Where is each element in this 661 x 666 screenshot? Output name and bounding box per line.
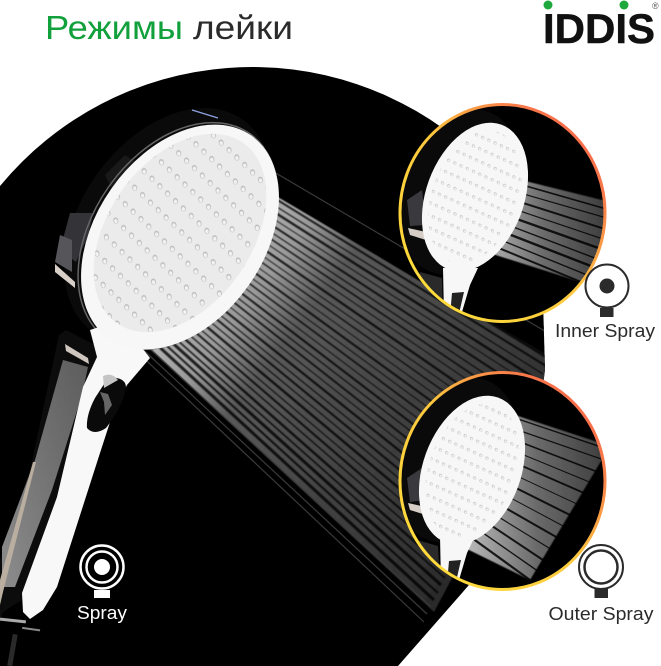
rim xyxy=(402,110,509,274)
icon: outer spray xyxy=(579,545,623,598)
inner spray water xyxy=(494,181,604,282)
neck xyxy=(420,272,442,299)
neck xyxy=(418,540,439,564)
spray mode label: Inner Spray: Inner Spray xyxy=(555,320,656,341)
gradient ring xyxy=(400,372,605,590)
icon: spray xyxy=(80,546,124,598)
rim xyxy=(402,378,512,542)
spray mode label: Outer Spray xyxy=(548,545,654,624)
face xyxy=(418,396,526,541)
inset: outer spray xyxy=(398,371,606,591)
spray mode label: Outer Spray: Outer Spray xyxy=(548,603,654,624)
title: лейки xyxy=(193,9,293,46)
logo: IDDIS: IDDIS xyxy=(543,5,655,52)
handle xyxy=(0,320,150,666)
gradient ring xyxy=(400,104,605,322)
shower head face with nozzles xyxy=(40,87,320,387)
shower head rim xyxy=(21,69,319,387)
title: Режимы xyxy=(45,9,183,46)
logo: IDDIS: ® xyxy=(652,1,659,11)
slider button xyxy=(87,378,126,432)
hose bracket xyxy=(0,618,40,666)
title xyxy=(45,9,293,46)
spray mode label: Inner Spray xyxy=(555,264,656,341)
inset: inner spray xyxy=(398,103,606,323)
water spray: main xyxy=(144,172,545,622)
outer spray water xyxy=(465,415,610,580)
spray mode label: Spray: Spray xyxy=(77,602,128,623)
face xyxy=(422,122,528,268)
spray mode label: Spray xyxy=(77,546,128,623)
black circular background with main shower xyxy=(0,67,565,666)
icon: inner spray xyxy=(586,264,628,317)
